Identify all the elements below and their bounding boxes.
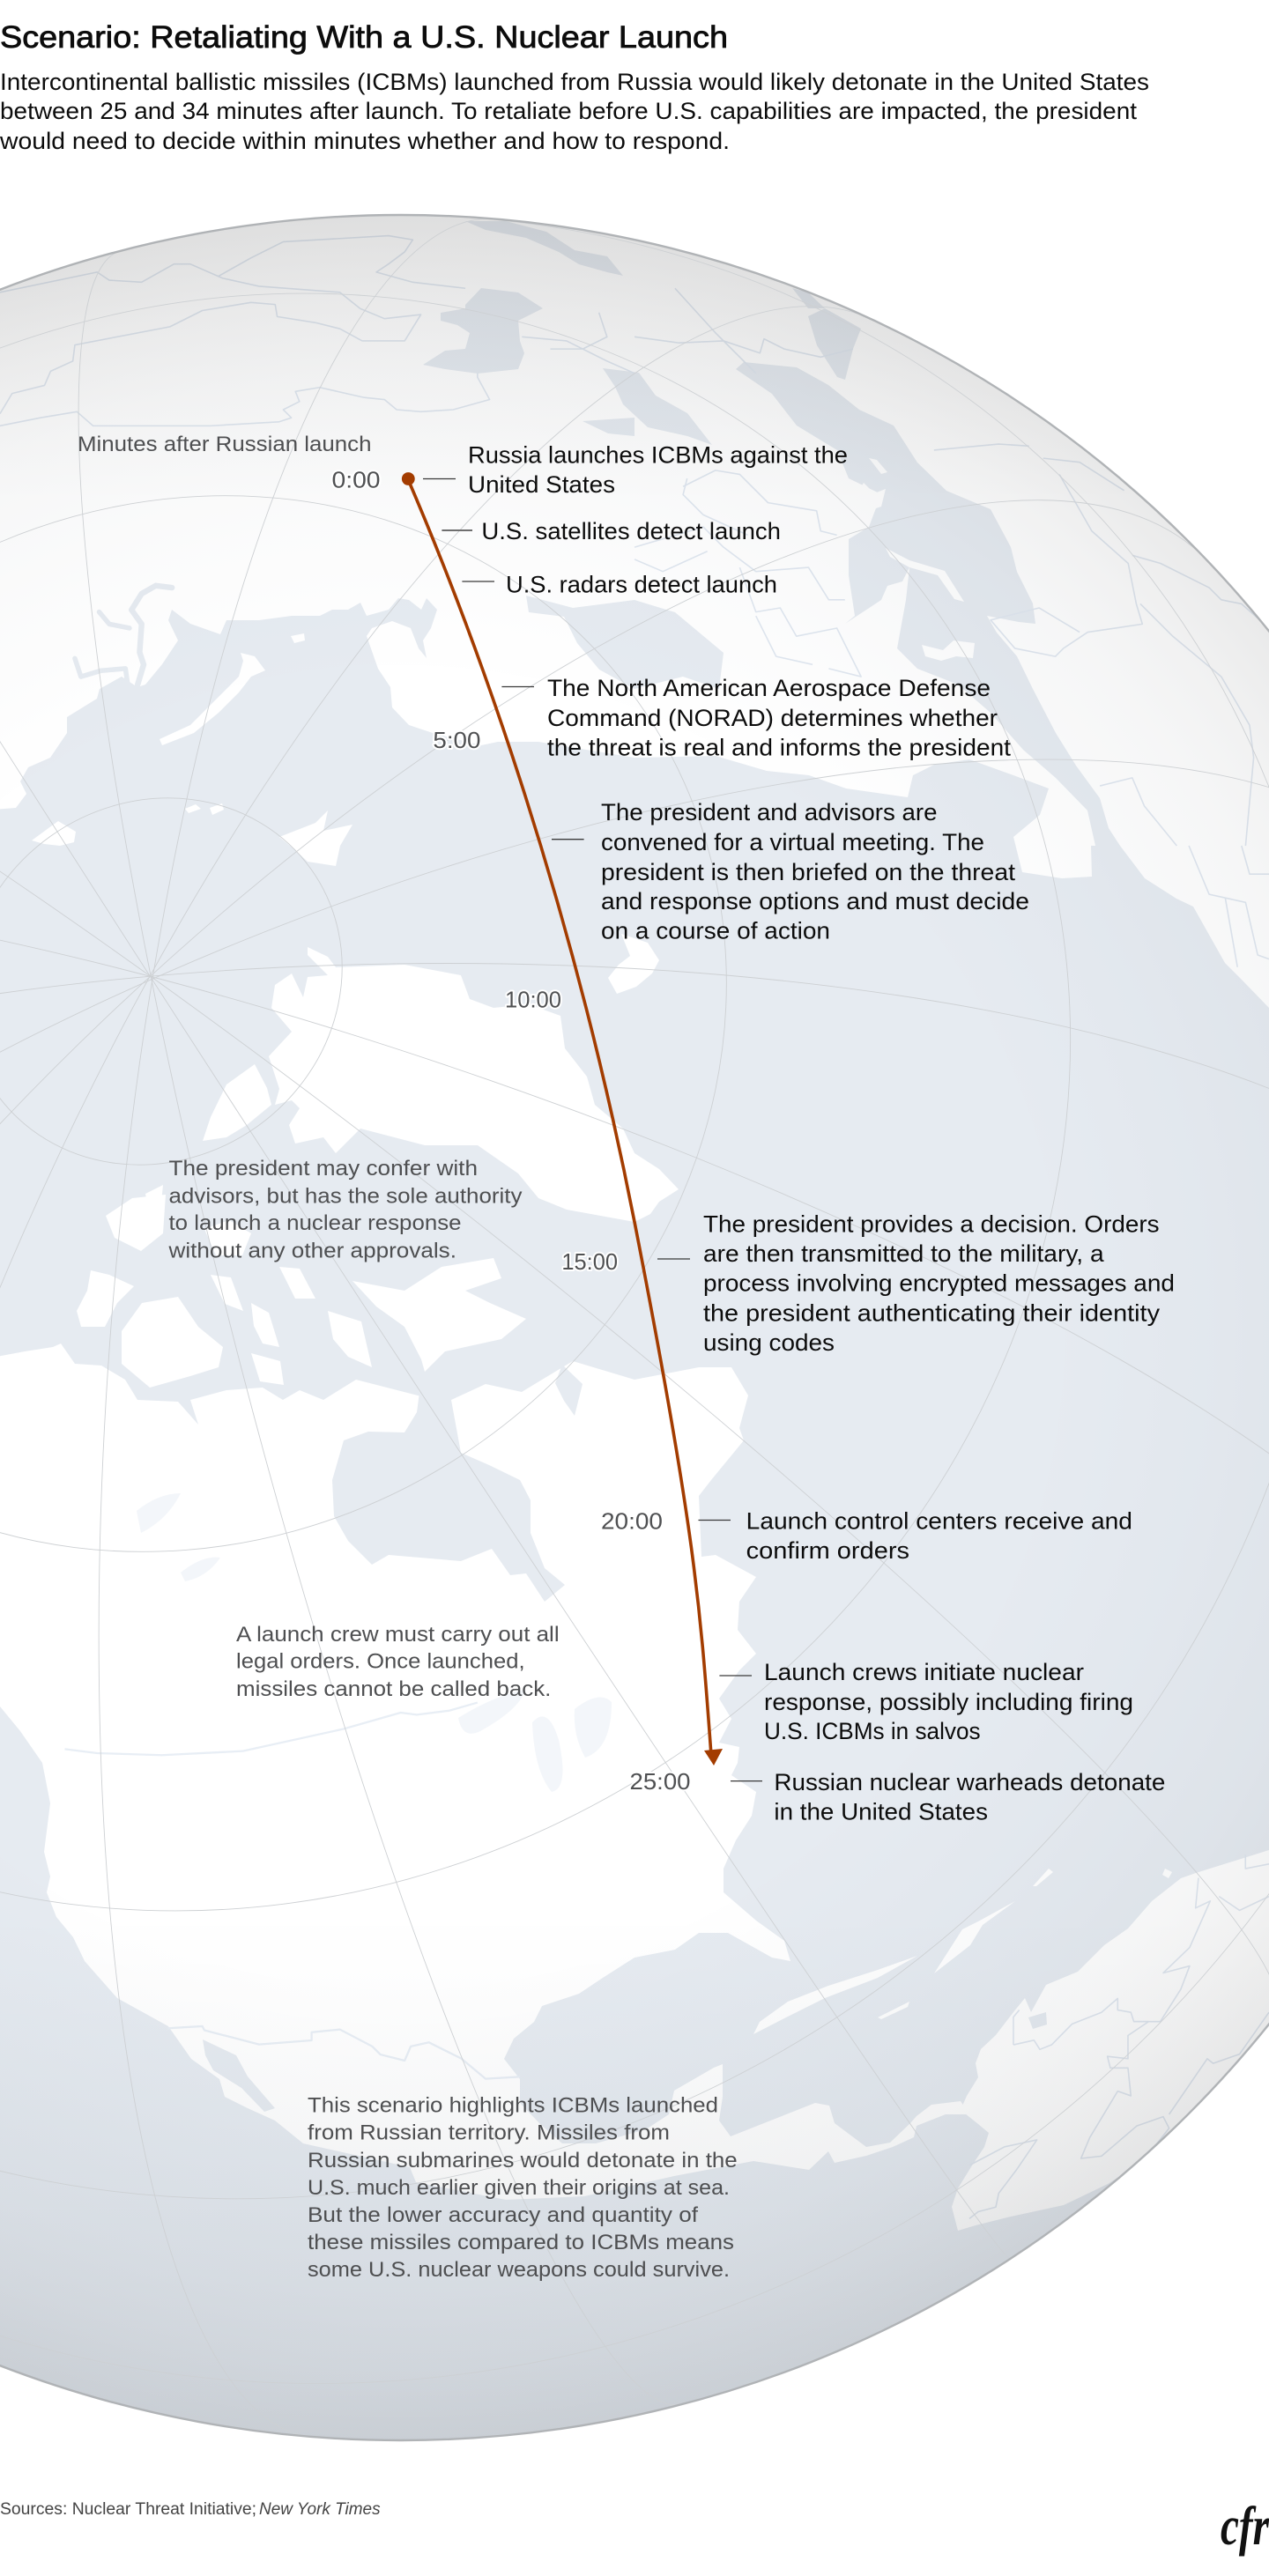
intro text [0, 69, 1149, 154]
note: submarine scenario: from Russian territory. Missiles from [308, 2121, 670, 2145]
step: NORAD: the threat is real and informs the president [547, 735, 1012, 761]
land: Greenland [269, 947, 679, 1222]
step: president briefed: and response options and must decide [601, 888, 1029, 914]
step: warheads detonate: in the United States [774, 1799, 988, 1825]
step: control centers confirm: Launch control centers receive and [746, 1508, 1132, 1535]
note: president's sole authority: The president may confer with [169, 1157, 478, 1181]
step: warheads detonate [731, 1769, 1165, 1825]
step: president briefed: The president and advisors are [601, 799, 938, 825]
step: president decides: using codes [703, 1329, 835, 1356]
land: Canadian Arctic archipelago [77, 1064, 526, 1388]
missile trajectory arrow [402, 472, 723, 1765]
time label 0:00: 0:00 [331, 467, 381, 493]
note: launch crew orders: legal orders. Once launched, [236, 1649, 525, 1674]
step: Russia launches: Russia launches ICBMs against the [468, 442, 848, 469]
step: crews initiate response [719, 1659, 1133, 1744]
axis label: minutes after launch: Minutes after Russian launch [78, 433, 371, 456]
step: crews initiate response: U.S. ICBMs in salvos [764, 1718, 981, 1744]
national borders [0, 236, 1269, 2218]
time label 15:00: 15:00 [561, 1248, 618, 1275]
step: president briefed: on a course of action [601, 918, 830, 944]
step: Russia launches [423, 442, 848, 498]
note: launch crew orders: missiles cannot be called back. [236, 1677, 551, 1701]
land: South America [952, 1850, 1269, 2231]
step: warheads detonate: Russian nuclear warheads detonate [774, 1769, 1165, 1795]
note: submarine scenario: U.S. much earlier given their origins at sea. [308, 2176, 730, 2200]
land: Arctic islands [32, 633, 659, 994]
land: Eurasia and Africa [0, 176, 1269, 1031]
land: Caribbean islands [753, 1869, 1172, 2034]
note: president's sole authority [167, 1157, 523, 1263]
step: crews initiate response: Launch crews initiate nuclear [764, 1659, 1084, 1685]
step: Russia launches: United States [468, 471, 615, 498]
step: control centers confirm: confirm orders [746, 1537, 909, 1564]
step: president decides: the president authenticating their identity [703, 1300, 1161, 1327]
note: president's sole authority: advisors, but has the sole authority [169, 1184, 523, 1209]
step: president decides: The president provides a decision. Orders [703, 1210, 1160, 1237]
step: president briefed: president is then briefed on the threat [601, 859, 1016, 885]
estuaries on the Arctic coast [75, 586, 172, 685]
step: crews initiate response: response, possibly including firing [764, 1689, 1133, 1715]
step: president decides [657, 1210, 1175, 1356]
step: radars detect: U.S. radars detect launch [506, 571, 777, 597]
step: control centers confirm [698, 1508, 1132, 1564]
note: submarine scenario: This scenario highlights ICBMs launched [308, 2094, 718, 2118]
islands in European seas [862, 458, 975, 661]
step: president briefed [552, 799, 1029, 944]
sources [0, 2500, 381, 2519]
water: Lake Maracaibo [1028, 2012, 1047, 2029]
time label 25:00: 25:00 [629, 1768, 691, 1795]
sources: Sources: Nuclear Threat Initiative; [0, 2500, 256, 2519]
seas inside Eurasia [423, 221, 1120, 846]
time label 10:00: 10:00 [505, 987, 561, 1013]
note: launch crew orders: A launch crew must carry out all [236, 1623, 560, 1647]
note: submarine scenario: But the lower accuracy and quantity of [308, 2203, 698, 2227]
time label 5:00: 5:00 [433, 727, 480, 753]
step: NORAD: The North American Aerospace Defense [547, 675, 991, 701]
step: NORAD: Command (NORAD) determines whether [547, 705, 998, 731]
step: president briefed: convened for a virtual meeting. The [601, 829, 984, 855]
note: submarine scenario: these missiles compared to ICBMs means [308, 2231, 734, 2254]
step: satellites detect: U.S. satellites detect launch [481, 518, 781, 544]
note: submarine scenario: Russian submarines would detonate in the [308, 2149, 738, 2173]
sources: New York Times [259, 2500, 381, 2519]
time label 20:00: 20:00 [601, 1508, 663, 1535]
water: Hudson Bay and nearby bays [203, 1365, 583, 2112]
note: launch crew orders [236, 1623, 560, 1701]
step: NORAD [501, 675, 1012, 761]
note: submarine scenario: some U.S. nuclear weapons could survive. [308, 2258, 730, 2282]
intro text: would need to decide within minutes whether and how to respond. [0, 128, 730, 154]
intro text: between 25 and 34 minutes after launch. To retaliate before U.S. capabilities are impacted, the president [0, 98, 1138, 124]
note: submarine scenario [308, 2094, 738, 2282]
note: president's sole authority: to launch a nuclear response [169, 1211, 462, 1235]
faint inland lakes [137, 1493, 612, 1792]
step: president decides: process involving encrypted messages and [703, 1270, 1175, 1297]
note: president's sole authority: without any other approvals. [167, 1239, 456, 1263]
step: president decides: are then transmitted to the military, a [703, 1240, 1104, 1267]
ocean base [0, 598, 1269, 2439]
title: Scenario: Retaliating With a U.S. Nuclear Launch [0, 20, 728, 55]
intro text: Intercontinental ballistic missiles (ICBMs) launched from Russia would likely detonate in the United States [0, 69, 1149, 95]
land: North America [0, 1344, 969, 2200]
